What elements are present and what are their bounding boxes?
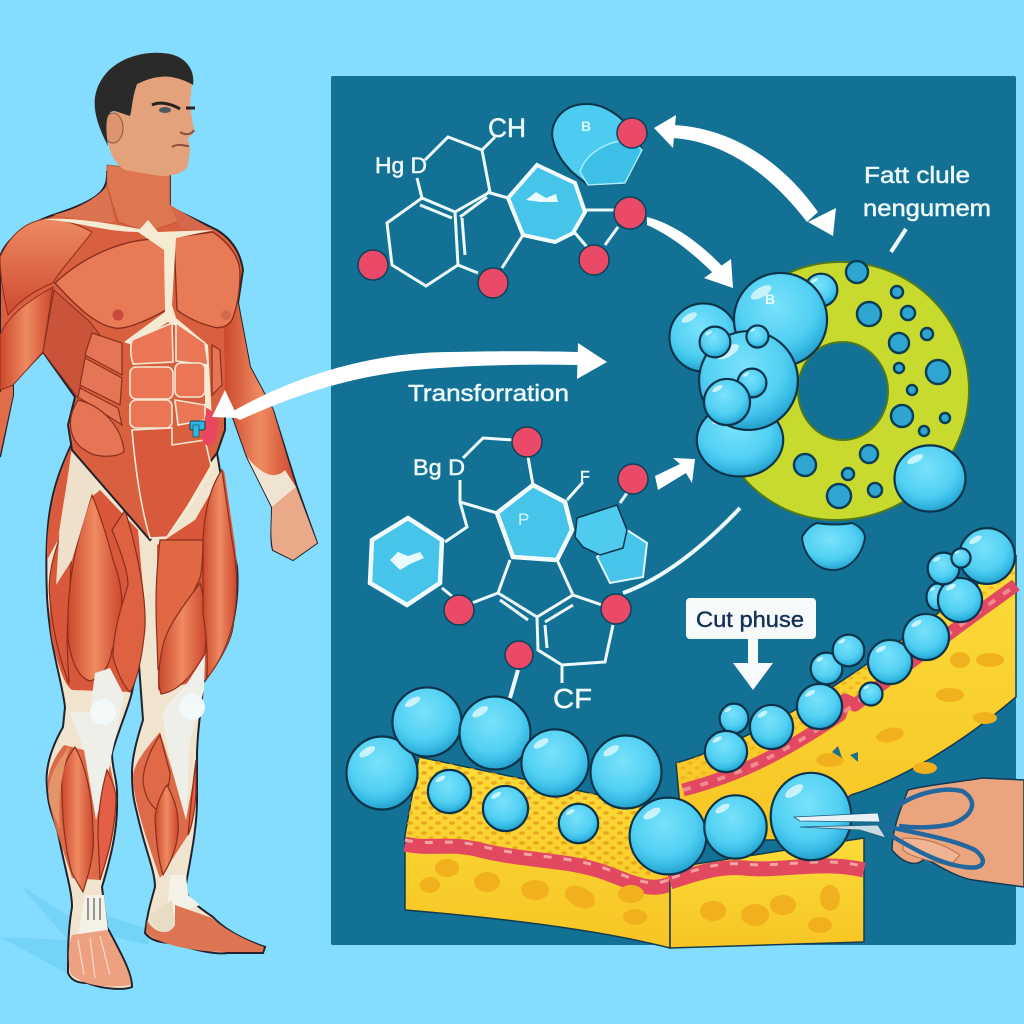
arrow: transformation <box>212 343 607 420</box>
label: cut phase <box>686 598 816 639</box>
icon: knee caps <box>90 699 116 725</box>
trapezius and neck <box>53 186 115 222</box>
right pec <box>174 232 240 328</box>
white knees and tendons <box>70 668 124 820</box>
arrow: molecule to ring <box>647 217 733 288</box>
label: fat cell: Fatt clule <box>864 162 970 188</box>
atoms <box>358 197 646 298</box>
molecule: top-right bubble: B <box>581 118 591 134</box>
label: transformation: Transforration <box>408 380 569 406</box>
label: fat cell <box>863 162 991 221</box>
ring: right shapes <box>597 530 647 583</box>
bubbles on tissue <box>346 528 1015 874</box>
bubble cluster: B <box>765 291 775 307</box>
inner bubbles <box>794 261 950 508</box>
molecule: lower: CF <box>553 683 592 714</box>
icon: fat target on waist <box>190 408 218 446</box>
head <box>107 72 194 176</box>
molecule: top-right bubble <box>552 104 647 185</box>
icon: hand with scissors <box>794 778 1024 887</box>
molecule: lower <box>370 427 740 714</box>
groin tendon <box>170 456 216 535</box>
left pec <box>55 239 171 328</box>
molecule: top: CH <box>488 113 526 143</box>
bubble cluster <box>669 273 837 476</box>
thigh backing left <box>50 490 144 692</box>
droplet <box>802 523 865 570</box>
fat cell ring <box>711 261 969 520</box>
ring icon <box>526 192 558 202</box>
brows, eye, nose, mouth <box>152 103 195 109</box>
left deltoid <box>0 219 92 315</box>
molecule: lower: F <box>580 469 590 486</box>
left upper arm <box>0 287 53 390</box>
label: fat cell: nengumem <box>863 195 991 221</box>
ring: left hexagon <box>370 518 442 605</box>
labels: Bg D <box>413 455 465 480</box>
fat tissue: left block <box>405 757 670 948</box>
calf backing <box>48 745 116 880</box>
thigh muscles <box>49 510 72 684</box>
leader line <box>891 229 906 252</box>
arrow: lower molecule to ring <box>655 458 695 490</box>
panel: chemistry and fat tissue <box>331 76 1016 945</box>
hip tendon <box>56 445 110 585</box>
right hand <box>271 487 317 560</box>
hair <box>95 53 193 146</box>
label: cut phase: Cut phuse <box>696 607 804 632</box>
ankle tendons <box>78 895 108 935</box>
ear <box>103 113 123 143</box>
arrow: cut phase down <box>733 639 773 690</box>
feet <box>69 930 131 986</box>
atoms <box>444 427 648 669</box>
large bubble <box>894 445 966 512</box>
fat tissue: right strip <box>676 556 1016 840</box>
calf muscles <box>62 747 93 892</box>
oblique muscles <box>71 333 222 456</box>
arrow: double curved top <box>654 115 836 236</box>
labels: Hg D <box>375 153 427 178</box>
molecule: lower: P <box>518 510 529 529</box>
ring: blue polygon <box>508 165 585 242</box>
floor shadows <box>0 885 150 975</box>
sternum and collar tendons <box>42 219 214 420</box>
ring: central polygon <box>497 485 572 560</box>
lat <box>43 290 100 398</box>
right arm <box>224 303 296 507</box>
thigh backing right <box>157 470 237 690</box>
burn marks <box>832 746 858 762</box>
ring icon <box>390 552 424 570</box>
figure: muscular man <box>0 53 317 989</box>
molecule: top <box>358 113 646 298</box>
upper body silhouette <box>0 172 317 560</box>
legs <box>46 443 265 989</box>
fat tissue: front block <box>670 838 864 948</box>
nipples <box>112 310 124 320</box>
left forearm <box>0 386 13 455</box>
abdominals <box>130 323 212 538</box>
